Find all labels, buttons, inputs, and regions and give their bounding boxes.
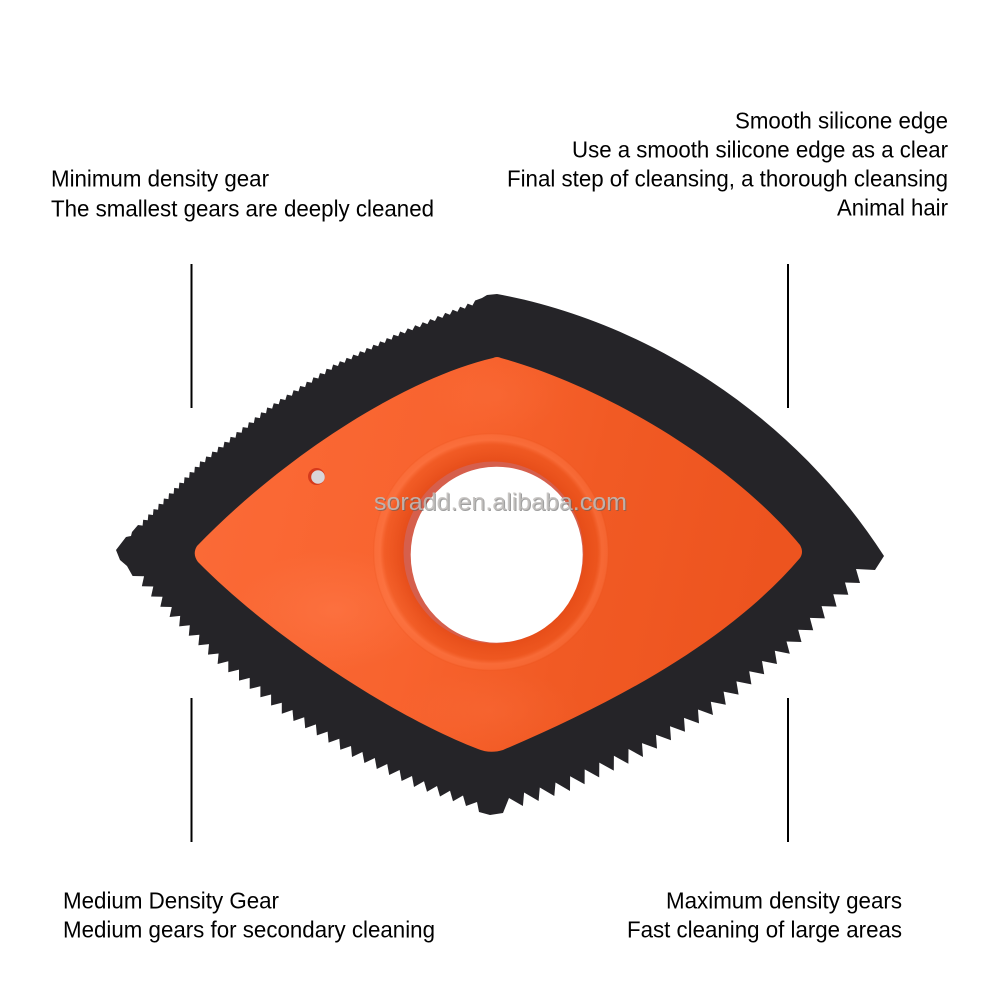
text block: maximum density gears	[627, 888, 902, 942]
text block: minimum density gear: The smallest gears are deeply cleaned	[51, 196, 434, 222]
text block: minimum density gear: Minimum density gear	[51, 166, 269, 192]
text block: smooth silicone edge: Animal hair	[837, 194, 948, 220]
small rivet	[308, 468, 325, 485]
leader line: top left	[190, 264, 192, 408]
raised ring around the hole	[373, 433, 609, 671]
text block: maximum density gears: Maximum density gears	[666, 888, 902, 914]
infographic canvas	[52, 112, 948, 942]
text block: medium density gear: Medium gears for secondary cleaning	[63, 916, 435, 942]
watermark: soradd.en.alibaba.com	[374, 489, 627, 516]
black toothed silicone body	[116, 294, 884, 815]
text block: minimum density gear	[51, 166, 434, 222]
orange handle	[195, 357, 802, 752]
text block: smooth silicone edge: Use a smooth silicone edge as a clear	[572, 136, 948, 162]
comb product illustration	[116, 294, 884, 815]
leader line: bottom right	[787, 698, 789, 842]
text block: medium density gear	[63, 888, 435, 942]
leader line: top right	[787, 264, 789, 408]
text block: smooth silicone edge: Final step of cleansing, a thorough cleansing	[507, 166, 948, 192]
centre hole	[411, 467, 583, 643]
handle highlights	[272, 462, 584, 644]
watermark: soradd.en.alibaba.com	[375, 490, 628, 517]
text block: smooth silicone edge: Smooth silicone edge	[735, 108, 948, 134]
inner rim shadow	[404, 462, 584, 644]
text block: medium density gear: Medium Density Gear	[63, 888, 279, 914]
text block: smooth silicone edge	[507, 108, 948, 220]
text block: maximum density gears: Fast cleaning of large areas	[627, 916, 902, 942]
leader line: bottom left	[190, 698, 192, 842]
